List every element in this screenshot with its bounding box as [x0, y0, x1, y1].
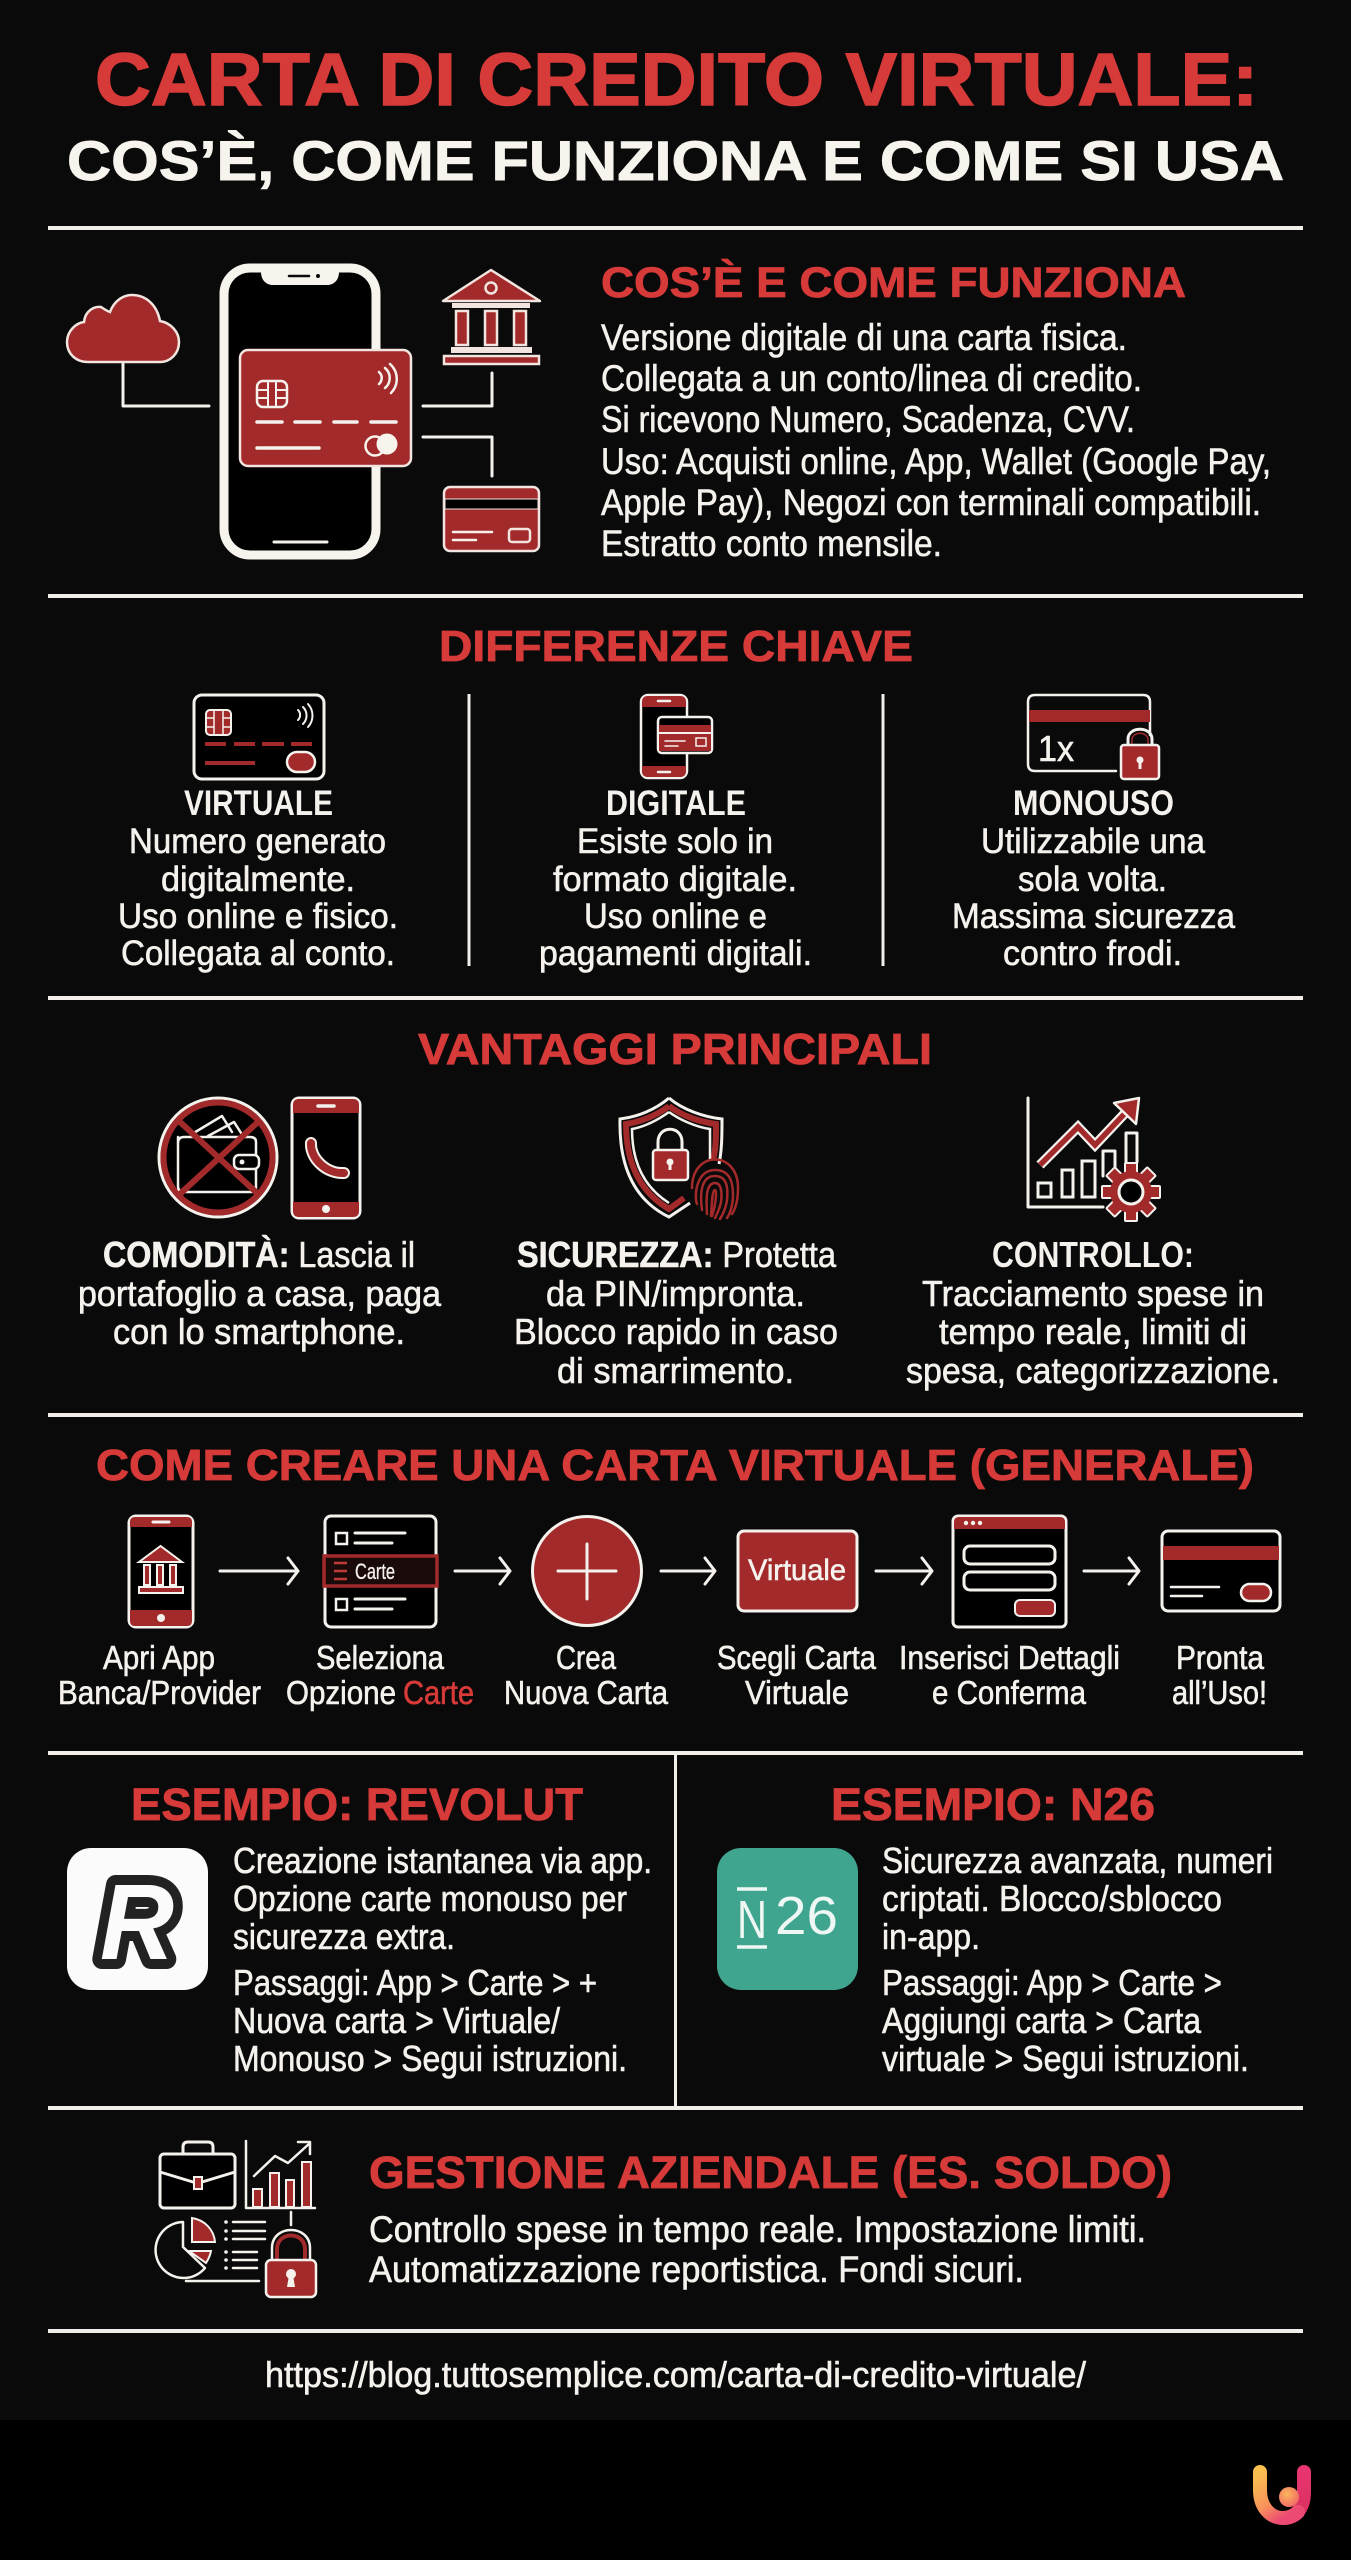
arrow [876, 1558, 932, 1584]
column: virtuale: Collegata al conto. [121, 934, 395, 973]
column: sicurezza: da PIN/impronta. [546, 1273, 805, 1314]
icon: virtuale button: Virtuale [748, 1554, 846, 1587]
step 5: inserisci dettagli: e Conferma [932, 1674, 1087, 1711]
column: virtuale: Numero generato [129, 822, 386, 861]
column: sicurezza: Blocco rapido in caso [514, 1311, 838, 1352]
icon: form [953, 1516, 1066, 1627]
step 1: apri app: Banca/Provider [58, 1674, 261, 1711]
column: digitale [539, 695, 812, 973]
heading: ESEMPIO: REVOLUT [131, 1779, 583, 1830]
text block: criptati. Blocco/sblocco [882, 1878, 1222, 1919]
icon: menu with carte option: Carte [355, 1559, 395, 1584]
step 4: scegli carta virtuale: Virtuale [745, 1674, 849, 1711]
text block: Aggiungi carta > Carta [882, 2000, 1202, 2041]
panel: vantaggi principali [78, 1025, 1280, 1391]
icon: n26 logo [717, 1848, 858, 1990]
icon: crossed wallet and phone [159, 1098, 360, 1218]
column: digitale: pagamenti digitali. [539, 934, 812, 973]
text block: sicurezza extra. [233, 1916, 455, 1957]
text block: Creazione istantanea via app. [233, 1840, 652, 1881]
column: digitale: Uso online e [584, 897, 767, 936]
text block: Apple Pay), Negozi con terminali compatibili. [601, 482, 1261, 523]
step 2: seleziona opzione carte: Opzione [286, 1674, 396, 1711]
text block: Estratto conto mensile. [601, 523, 942, 564]
text block: Controllo spese in tempo reale. Impostazione limiti. [369, 2209, 1146, 2250]
column: monouso: contro frodi. [1003, 934, 1182, 973]
text block [369, 2209, 1146, 2290]
heading: VANTAGGI PRINCIPALI [418, 1025, 932, 1074]
text block: Passaggi: App > Carte > + [233, 1962, 597, 2003]
column: controllo: spesa, categorizzazione. [906, 1350, 1280, 1391]
heading: GESTIONE AZIENDALE (ES. SOLDO) [369, 2147, 1172, 2198]
icon: small card with connector [423, 437, 539, 551]
step 1: apri app [58, 1516, 261, 1711]
text block: Nuova carta > Virtuale/ [233, 2000, 560, 2041]
step 2: seleziona opzione carte [286, 1516, 474, 1711]
column: digitale: formato digitale. [553, 860, 797, 899]
step 6: pronta all'uso: all’Uso! [1172, 1674, 1267, 1711]
panel: differenze chiave [118, 622, 1235, 973]
text block [233, 1840, 652, 2079]
panel: cos'è e come funziona [67, 259, 1271, 564]
column: virtuale: digitalmente. [161, 860, 355, 899]
text block: Uso: Acquisti online, App, Wallet (Google Pay, [601, 441, 1271, 482]
panel: esempio revolut [67, 1779, 652, 2079]
heading: COS’È E COME FUNZIONA [601, 259, 1186, 307]
icon: n26 logo: 26 [775, 1886, 838, 1946]
column: sicurezza [514, 1098, 838, 1391]
heading: COME CREARE UNA CARTA VIRTUALE (GENERALE) [96, 1441, 1254, 1490]
icon: revolut logo [67, 1848, 208, 1990]
text block: Sicurezza avanzata, numeri [882, 1840, 1273, 1881]
text block: virtuale > Segui istruzioni. [882, 2038, 1249, 2079]
icon: bank with connector [423, 270, 540, 406]
column: digitale: Esiste solo in [577, 822, 773, 861]
icon: phone and card [641, 695, 712, 778]
column: comodità: portafoglio a casa, paga [78, 1273, 442, 1314]
arrow [220, 1558, 298, 1584]
column: comodità [78, 1098, 442, 1352]
text block [882, 1840, 1273, 2079]
column: comodità: con lo smartphone. [113, 1311, 405, 1352]
text block: in-app. [882, 1916, 980, 1957]
text block: Collegata a un conto/linea di credito. [601, 358, 1142, 399]
icon: plus circle [532, 1516, 642, 1626]
text block [601, 317, 1271, 564]
column: controllo: Tracciamento spese in [922, 1273, 1264, 1314]
panel: gestione aziendale [156, 2141, 1172, 2297]
column: monouso: sola volta. [1018, 860, 1167, 899]
column: controllo [906, 1098, 1280, 1391]
text block: Si ricevono Numero, Scadenza, CVV. [601, 399, 1135, 440]
arrow [661, 1558, 715, 1584]
column: virtuale: VIRTUALE [184, 784, 333, 823]
icon: revolut logo: R [100, 1861, 174, 1982]
text block: Opzione carte monouso per [233, 1878, 627, 1919]
column: monouso: Massima sicurezza [952, 897, 1235, 936]
text block: Passaggi: App > Carte > [882, 1962, 1222, 2003]
icon: business cluster [156, 2141, 316, 2297]
step 3: crea nuova carta: Crea [556, 1639, 617, 1676]
column: sicurezza: SICUREZZA: Protetta [517, 1234, 837, 1275]
column: comodità: COMODITÀ: Lascia il [103, 1234, 415, 1275]
column: virtuale [118, 695, 398, 973]
step 6: pronta all'uso: Pronta [1176, 1639, 1265, 1676]
logo [1260, 2472, 1304, 2518]
step 1: apri app: Apri App [103, 1639, 215, 1676]
icon: shield with lock and fingerprint [620, 1098, 738, 1219]
icon: cloud with connector [67, 295, 209, 406]
icon: virtuale button [738, 1531, 857, 1611]
step 4: scegli carta virtuale: Scegli Carta [717, 1639, 877, 1676]
column: virtuale: Uso online e fisico. [118, 897, 398, 936]
arrow [1084, 1558, 1139, 1584]
title: COS’È, COME FUNZIONA E COME SI USA [67, 129, 1284, 192]
title [67, 38, 1284, 192]
heading: ESEMPIO: N26 [831, 1779, 1155, 1830]
step 3: crea nuova carta: Nuova Carta [504, 1674, 669, 1711]
icon: single use card with lock: 1x [1038, 728, 1074, 769]
icon: growth chart with gear [1028, 1098, 1160, 1221]
text block: Monouso > Segui istruzioni. [233, 2038, 627, 2079]
panel: esempio n26 [717, 1779, 1273, 2079]
icon: menu with carte option [324, 1516, 437, 1627]
icon: ready card [1162, 1531, 1280, 1611]
step 5: inserisci dettagli [899, 1516, 1120, 1711]
column: controllo: tempo reale, limiti di [939, 1311, 1247, 1352]
step 2: seleziona opzione carte: Carte [403, 1674, 474, 1711]
title: CARTA DI CREDITO VIRTUALE: [95, 38, 1258, 121]
source url: https://blog.tuttosemplice.com/carta-di-credito-virtuale/ [265, 2354, 1086, 2395]
icon: single use card with lock [1028, 695, 1159, 779]
step 3: crea nuova carta [504, 1516, 669, 1711]
panel: come creare una carta virtuale [58, 1441, 1280, 1711]
column: monouso [952, 695, 1235, 973]
icon: smartphone with credit card [224, 266, 411, 555]
step 5: inserisci dettagli: Inserisci Dettagli [899, 1639, 1120, 1676]
arrow [455, 1558, 510, 1584]
text block: Versione digitale di una carta fisica. [601, 317, 1127, 358]
column: monouso: Utilizzabile una [981, 822, 1205, 861]
column: digitale: DIGITALE [606, 784, 746, 823]
step 4: scegli carta virtuale [717, 1531, 877, 1711]
heading: DIFFERENZE CHIAVE [439, 622, 913, 671]
column: controllo: CONTROLLO: [992, 1234, 1194, 1275]
step 2: seleziona opzione carte: Seleziona [316, 1639, 445, 1676]
icon: virtual card [194, 695, 324, 779]
icon: phone with bank [129, 1516, 193, 1627]
icon: n26 logo: N [737, 1890, 767, 1950]
step 6: pronta all'uso [1162, 1531, 1280, 1711]
column: sicurezza: di smarrimento. [557, 1350, 794, 1391]
text block: Automatizzazione reportistica. Fondi sicuri. [369, 2249, 1024, 2290]
column: monouso: MONOUSO [1013, 784, 1174, 823]
